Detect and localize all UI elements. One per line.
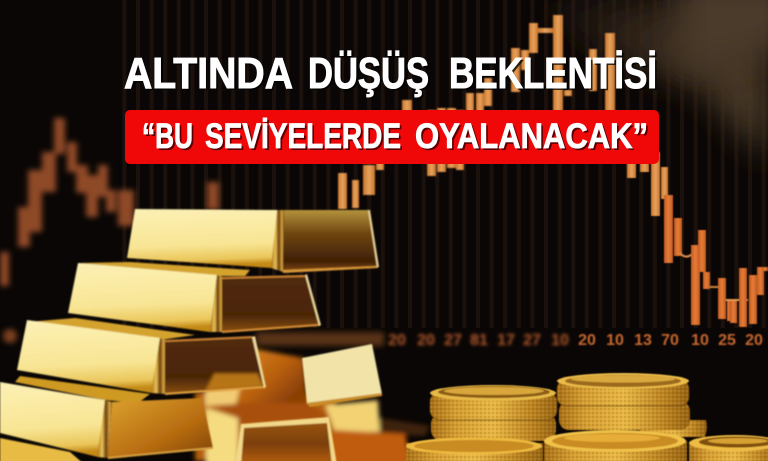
lower gold bar end: [235, 417, 337, 461]
candlestick chart falling on the right: [627, 150, 768, 327]
chart axis line and date labels: 20: [417, 332, 435, 349]
coin front left: [406, 438, 543, 461]
gold bar two: [68, 262, 321, 333]
chart axis line and date labels: 70: [661, 332, 679, 349]
red banner with quote: OYALANACAK”: [417, 119, 650, 158]
chart axis line and date labels: 13: [634, 332, 652, 349]
chart axis line and date labels: 20: [578, 332, 596, 349]
gold bar one: [127, 209, 379, 273]
red banner with quote: “BU: [144, 119, 195, 158]
title: ALTINDA: [126, 51, 295, 100]
red banner with quote: SEVİYELERDE: [205, 117, 401, 156]
coin front centre: [544, 430, 687, 461]
chart axis line and date labels: 27: [523, 332, 541, 349]
title: [124, 49, 659, 100]
title: BEKLENTİSİ: [449, 49, 657, 98]
chart axis line and date labels: 10: [606, 332, 624, 349]
red banner with quote: “BU: [142, 117, 193, 156]
blurred candlestick chart on the left: [0, 118, 219, 286]
chart axis line and date labels: 20: [388, 332, 406, 349]
chart axis line and date labels: 81: [470, 332, 488, 349]
title: ALTINDA: [124, 49, 293, 98]
coin stack centre: [557, 373, 690, 430]
chart axis line and date labels: 27: [444, 332, 462, 349]
back gold bar right: [302, 344, 382, 407]
gold bar four: [0, 376, 213, 459]
gold coin stacks: [406, 373, 768, 461]
chart axis line and date labels: 10: [551, 332, 569, 349]
coin stack left: [430, 385, 557, 441]
title: DÜŞÜŞ: [308, 49, 429, 98]
chart axis line and date labels: [0, 326, 768, 349]
red banner with quote: OYALANACAK”: [415, 117, 648, 156]
chart axis line and date labels: 10: [691, 332, 709, 349]
coin behind right: [640, 420, 707, 437]
base bar left: [0, 438, 85, 461]
gold bar three: [17, 318, 266, 395]
red banner with quote: [125, 110, 659, 164]
back gold bars, out of focus: [195, 348, 430, 461]
candlestick chart in the centre: [338, 15, 615, 209]
title: BEKLENTİSİ: [451, 51, 659, 100]
chart axis line and date labels: 20: [745, 332, 763, 349]
title: DÜŞÜŞ: [310, 51, 431, 100]
coin front right: [689, 435, 768, 461]
chart axis line and date labels: 17: [497, 332, 515, 349]
gold bars stack: [0, 209, 382, 461]
chart axis line and date labels: 25: [718, 332, 736, 349]
red banner with quote: SEVİYELERDE: [207, 119, 403, 158]
